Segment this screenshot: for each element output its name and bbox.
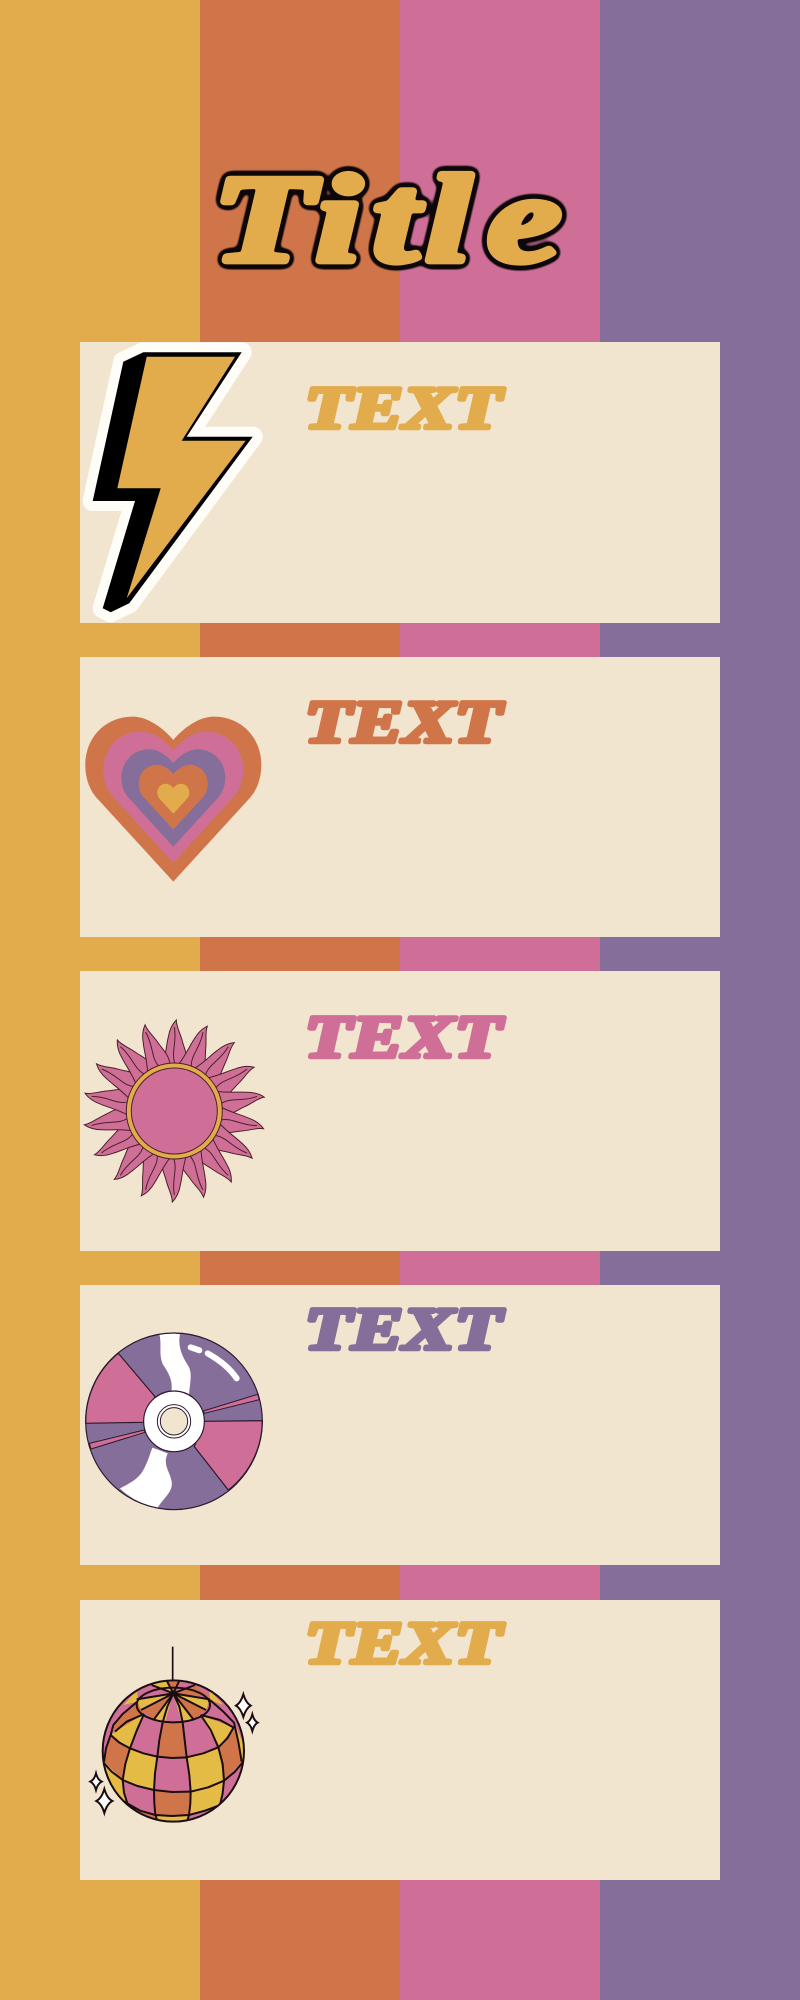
- longitudes: [154, 1693, 173, 1823]
- panel: card 1 lightning: [80, 342, 720, 623]
- heading: TEXT: [304, 1610, 505, 1676]
- card background: [80, 1600, 720, 1880]
- heading: TEXT: [304, 375, 505, 441]
- card background: [80, 971, 720, 1251]
- icon: sun: [83, 1020, 266, 1202]
- icon: layered heart: [85, 717, 261, 882]
- panel: card 4 disc: [80, 1285, 720, 1565]
- sparkle group: [90, 1694, 258, 1813]
- heading: TEXT: [304, 689, 505, 755]
- card background: [80, 342, 720, 623]
- cap ring and spokes: [137, 1688, 210, 1722]
- icon: lightning bolt: [93, 352, 253, 612]
- panel: card 3 sun: [80, 971, 720, 1251]
- heading: TEXT: [304, 1296, 505, 1362]
- card background: [80, 1285, 720, 1565]
- panel: card 5 disco ball: [80, 1600, 720, 1880]
- card background: [80, 657, 720, 937]
- icon: compact disc: [86, 1333, 262, 1510]
- icon: disco ball: [90, 1647, 258, 1825]
- title: Title: [212, 150, 562, 289]
- latitudes: [115, 1714, 144, 1732]
- panel: card 2 heart: [80, 657, 720, 937]
- heading: TEXT: [304, 1004, 505, 1070]
